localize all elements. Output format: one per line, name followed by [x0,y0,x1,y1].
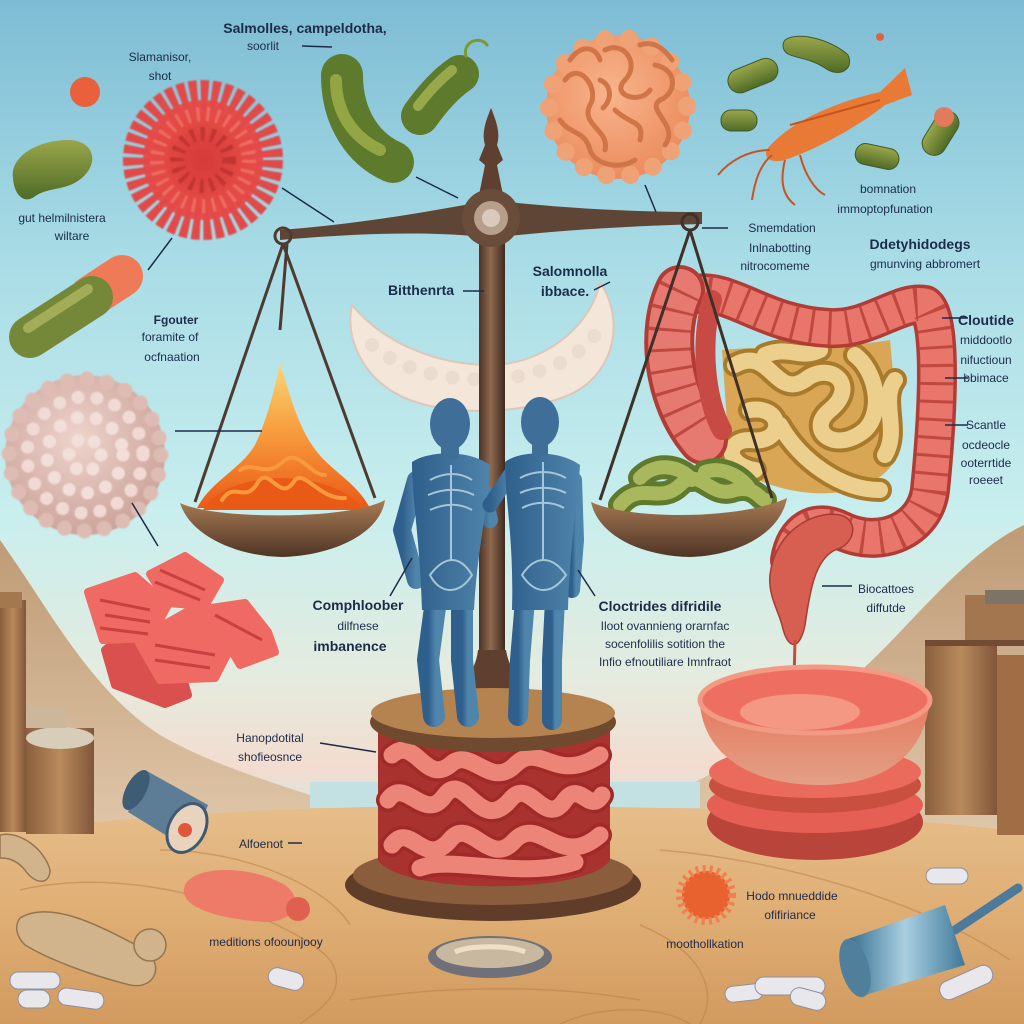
label: dehydrogenase: gmunving abbromert [870,257,981,271]
label: Scantle: Scantle [966,418,1006,432]
label: Hepatobiliary: Hanopdotital [236,731,304,745]
sandy ground [0,806,1024,1024]
small intestine yellow coils [722,340,900,493]
microbe: green and orange capsule [28,276,122,337]
label: Scantle: roeeet [969,473,1004,487]
scale: hub [462,189,520,247]
human figure: right [490,397,580,720]
label: dehydrogenase [869,236,981,271]
label: Hodo: Hodo mnueddide [746,889,838,903]
label: top left microbe [129,50,191,83]
label: stimulation: nitrocomeme [740,259,810,273]
pink lumpy ball [5,375,165,535]
base: upper platform [370,688,616,752]
scale: post foot [455,650,530,700]
label: Clostridium difficile: socenfolilis sotition the [605,637,725,651]
label: modification: moothollkation [666,937,744,951]
flame on left pan [197,362,370,510]
label: Hepatobiliary: shofieosnce [238,750,302,764]
red meat cubes [88,556,275,704]
label: dehydrogenase: Ddetyhidodegs [869,236,971,252]
label: stimulation [740,221,816,273]
label: top right microbe: immoptopfunation [837,202,933,216]
large intestine [669,290,937,560]
label: top left microbe: shot [149,69,172,83]
microbe: red spiky ball [141,98,265,222]
label: Bifidobacteria: Bitthenrta [388,282,454,298]
sea horizon [310,782,700,808]
microbe: large curved green bacillus [336,75,393,162]
label: stimulation: Inlnabotting [749,241,811,255]
microbe: orange brain ball [546,35,690,179]
label: top right microbe [837,182,933,216]
capsule bottom right [926,868,968,884]
label: Fgouter [142,313,200,364]
label: Campylobacter imbalance: dilfnese [337,619,379,633]
microbe: green bacillus with tail [418,40,487,116]
microbe: green bean [13,140,92,199]
scale: left chains [195,228,375,502]
label: Salmonella: Salomnolla [533,263,608,279]
label: Scantle [961,418,1012,487]
scale: post [479,235,505,660]
label: Clostridium difficile: Infio efnoutiliare Imnfraot [599,655,732,669]
label: Alfoenot: Alfoenot [239,837,284,851]
label: Scantle: ocdeocle [962,438,1010,452]
label: gut bacteria [18,211,106,243]
label: Campylobacter imbalance [312,597,404,654]
capsules bottom left [10,966,306,1010]
label: Salmonella Campylobacter [223,20,387,53]
base: lower platform [345,845,641,921]
label: Clostridium difficile: Iloot ovannieng orarnfac [601,619,729,633]
background hills [0,525,1024,830]
leader lines [132,46,968,843]
scale: right chains [600,214,772,500]
label: Campylobacter imbalance: imbanence [313,638,387,654]
microbes top right: small dots [876,33,954,127]
pale crescent organ [350,282,614,411]
label: Bacteroides difficile: diffutde [866,601,906,615]
human figure: left [402,398,490,716]
label: Fgouter: foramite of [142,330,199,344]
appendix and drip [770,514,853,720]
label: Clostridium [958,312,1014,385]
label: Bacteroides difficile: Biocattoes [858,582,914,596]
label: nutrition: meditions ofoounjooy [209,935,323,949]
orange clump [680,869,732,921]
microbes top right: green rods [721,36,963,171]
label: Bacteroides difficile [858,582,914,615]
scale: beam [280,200,702,240]
label: gut bacteria: gut helmilnistera [18,211,106,225]
tin dish [428,936,552,978]
ground wood grain [20,850,1010,1024]
label: Campylobacter imbalance: Comphloober [312,597,404,613]
microbe: small orange dot [70,77,100,107]
label: stimulation: Smemdation [748,221,816,235]
label: Fgouter: ocfnaation [144,350,200,364]
label: Clostridium: Cloutide [958,312,1014,328]
label: Clostridium: middootlo [960,333,1012,347]
label: Hepatobiliary [236,731,304,764]
green worms on right pan [620,467,765,505]
label: Salmonella Campylobacter: Salmolles, campeldotha, [223,20,387,36]
label: gut bacteria: wiltare [54,229,90,243]
label: Salmonella [533,263,608,299]
left pan [180,500,385,557]
label: Hodo: ofifiriance [764,908,816,922]
barrels left [0,592,94,834]
label: Clostridium difficile: Cloctrides difridile [599,598,722,614]
label: Clostridium: nifuctioun [960,353,1012,367]
salmon slab [184,870,310,922]
label: top left microbe: Slamanisor, [129,50,191,64]
label: Clostridium difficile [599,598,732,669]
label: Clostridium: bbimace [963,371,1009,385]
scale: finial [479,108,503,195]
label: Fgouter: Fgouter [154,313,199,327]
scoop tool [833,888,1018,1001]
icon: shrimp [718,68,912,205]
label: top right microbe: bomnation [860,182,916,196]
capsules bottom right [724,962,996,1012]
label: Scantle: ooterrtide [961,456,1012,470]
right pan [591,498,787,557]
barrels right [925,590,1024,835]
label: Salmonella Campylobacter: soorlit [247,39,280,53]
label: Hodo [746,889,838,922]
stacked red bowls [700,667,930,860]
base: glass cylinder with intestines [378,725,610,886]
can on ground [117,766,215,859]
label: Salmonella: ibbace. [541,283,589,299]
sweet potatoes left [0,834,166,986]
